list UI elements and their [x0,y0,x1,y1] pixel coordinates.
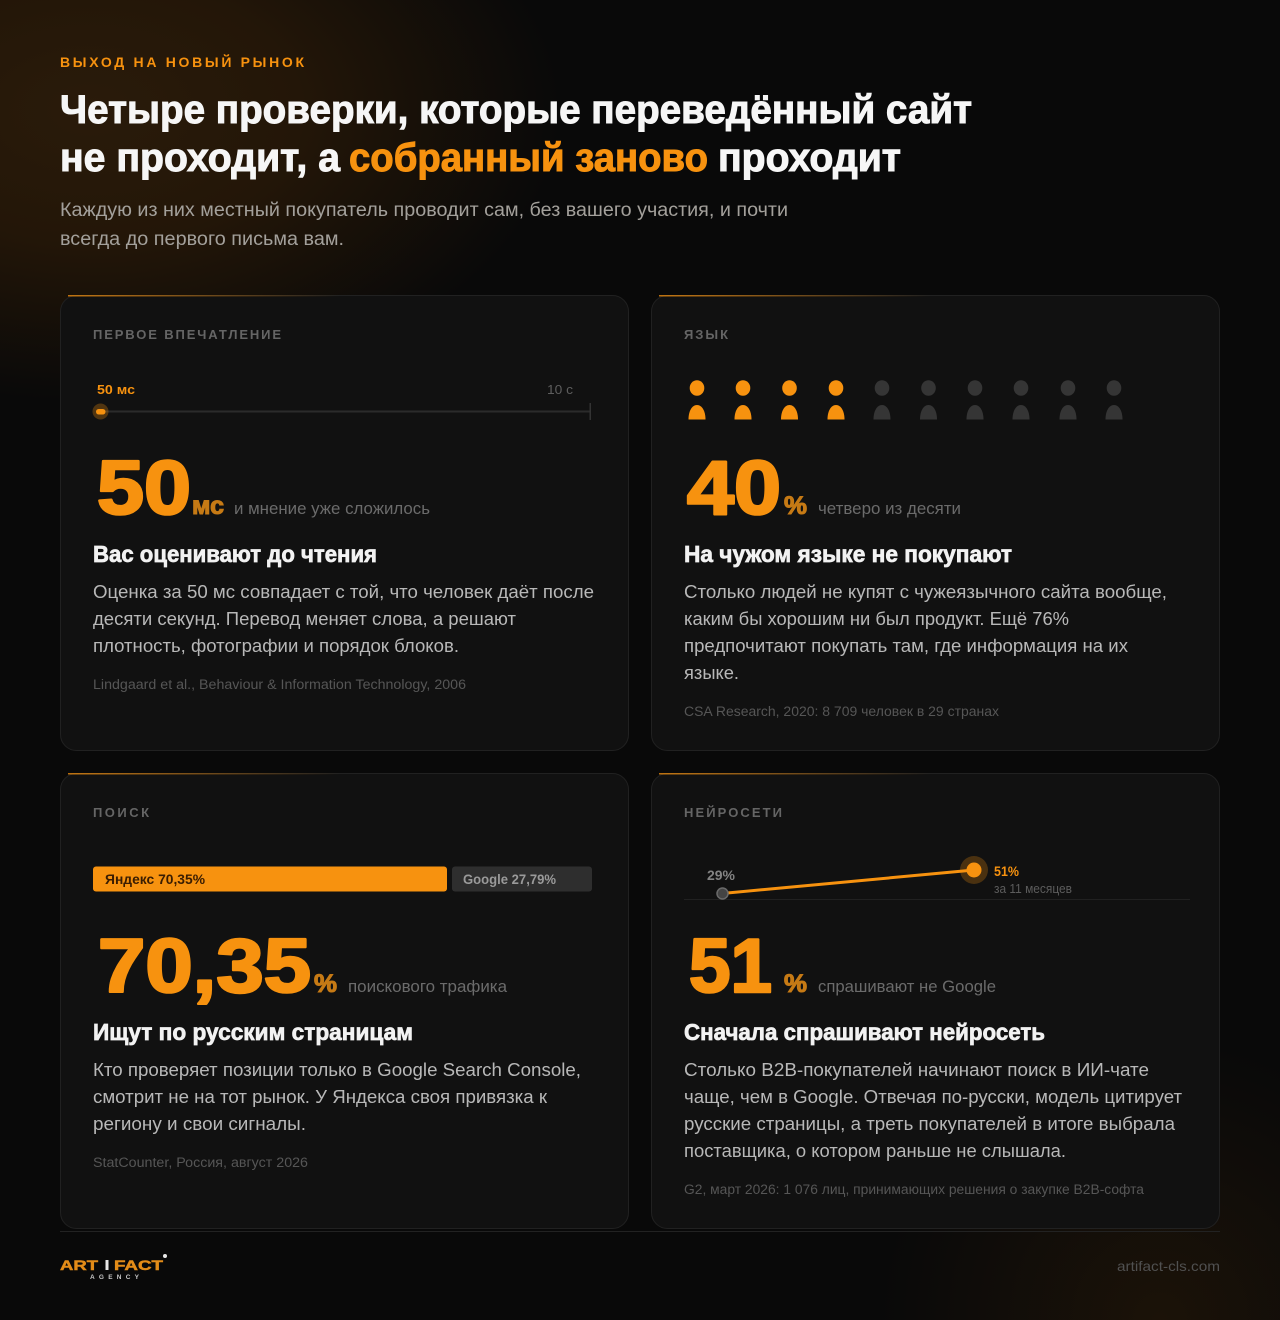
timeline chart: 10 с [547,382,574,397]
title: не проходит, а [60,136,341,180]
line chart: 29% [707,868,735,883]
big number: 70,35 [98,924,311,1009]
eyebrow: ВЫХОД НА НОВЫЙ РЫНОК [60,53,304,70]
body text: десяти секунд. Перевод меняет слова, а решают [93,609,516,629]
big number [687,446,961,531]
body text: Кто проверяет позиции только в Google Search Console, [93,1060,581,1080]
body text [684,1060,1182,1161]
body text: каким бы хорошим ни был продукт. Ещё 76% [684,609,1069,629]
website url: artifact-cls.com [1117,1258,1220,1274]
big number: спрашивают не Google [818,978,996,996]
body text: поставщика, о котором раньше не слышала. [684,1141,1066,1161]
subtitle [60,200,788,250]
stacked bar chart: Яндекс 70,35% [105,872,205,887]
stacked bar chart: Google 27,79% [463,872,556,887]
heading: На чужом языке не покупают [684,541,1012,567]
big number: мс [192,492,224,520]
source: G2, март 2026: 1 076 лиц, принимающих решения о закупке B2B-софта [684,1182,1144,1197]
line chart: 51% [994,864,1019,879]
big number [97,446,430,531]
body text [93,582,594,656]
panel: neural networks [652,773,1220,1228]
body text: предпочитают покупать там, где информация на их [684,636,1128,656]
logo: FACT [114,1257,164,1273]
line chart [684,856,1190,900]
subtitle: всегда до первого письма вам. [60,229,344,250]
label: ПОИСК [93,805,149,820]
body text: Столько B2B-покупателей начинают поиск в ИИ-чате [684,1060,1149,1080]
title [60,88,972,180]
body text: языке. [684,663,739,683]
body text: региону и свои сигналы. [93,1114,306,1134]
panel: language [652,295,1220,750]
heading: Ищут по русским страницам [93,1019,413,1045]
body text: плотность, фотографии и порядок блоков. [93,636,459,656]
logo [60,1254,167,1281]
big number: и мнение уже сложилось [234,500,430,518]
logo: ART [60,1257,99,1273]
heading: Сначала спрашивают нейросеть [684,1019,1045,1045]
big number: % [784,492,807,520]
panel: search [60,773,628,1228]
timeline chart: 50 мс [97,382,135,397]
title: проходит [718,136,901,180]
big number: четверо из десяти [818,500,961,518]
big number: 51 [689,924,772,1009]
big number: 40 [687,446,781,531]
source: StatCounter, Россия, август 2026 [93,1155,308,1170]
source: CSA Research, 2020: 8 709 человек в 29 странах [684,704,999,719]
panel: first impression [60,295,628,750]
line chart: за 11 месяцев [994,882,1072,896]
big number [98,924,508,1009]
big number: поискового трафика [348,978,508,996]
source: Lindgaard et al., Behaviour & Information Technology, 2006 [93,677,466,692]
body text: Столько людей не купят с чужеязычного сайта вообще, [684,582,1167,602]
subtitle: Каждую из них местный покупатель проводит сам, без вашего участия, и почти [60,200,788,221]
timeline chart [92,382,591,420]
title: собранный заново [349,136,708,180]
big number: % [314,970,337,998]
big number: 50 [97,446,191,531]
big number [689,924,996,1009]
pictogram: 4 of 10 people [688,380,1122,420]
body text [93,1060,581,1134]
body text [684,582,1167,683]
heading: Вас оценивают до чтения [93,541,377,567]
body text: русские страницы, а треть покупателей в итоге выбрала [684,1114,1176,1134]
label: НЕЙРОСЕТИ [684,805,782,820]
body text: смотрит не на тот рынок. У Яндекса своя привязка к [93,1087,547,1107]
label: ЯЗЫК [684,327,728,342]
body text: Оценка за 50 мс совпадает с той, что человек даёт после [93,582,594,602]
stacked bar chart [93,866,592,892]
logo: AGENCY [90,1274,140,1281]
body text: чаще, чем в Google. Отвечая по-русски, модель цитирует [684,1087,1182,1107]
label: ПЕРВОЕ ВПЕЧАТЛЕНИЕ [93,327,281,342]
big number: % [784,970,807,998]
title: Четыре проверки, которые переведённый сайт [60,88,972,132]
